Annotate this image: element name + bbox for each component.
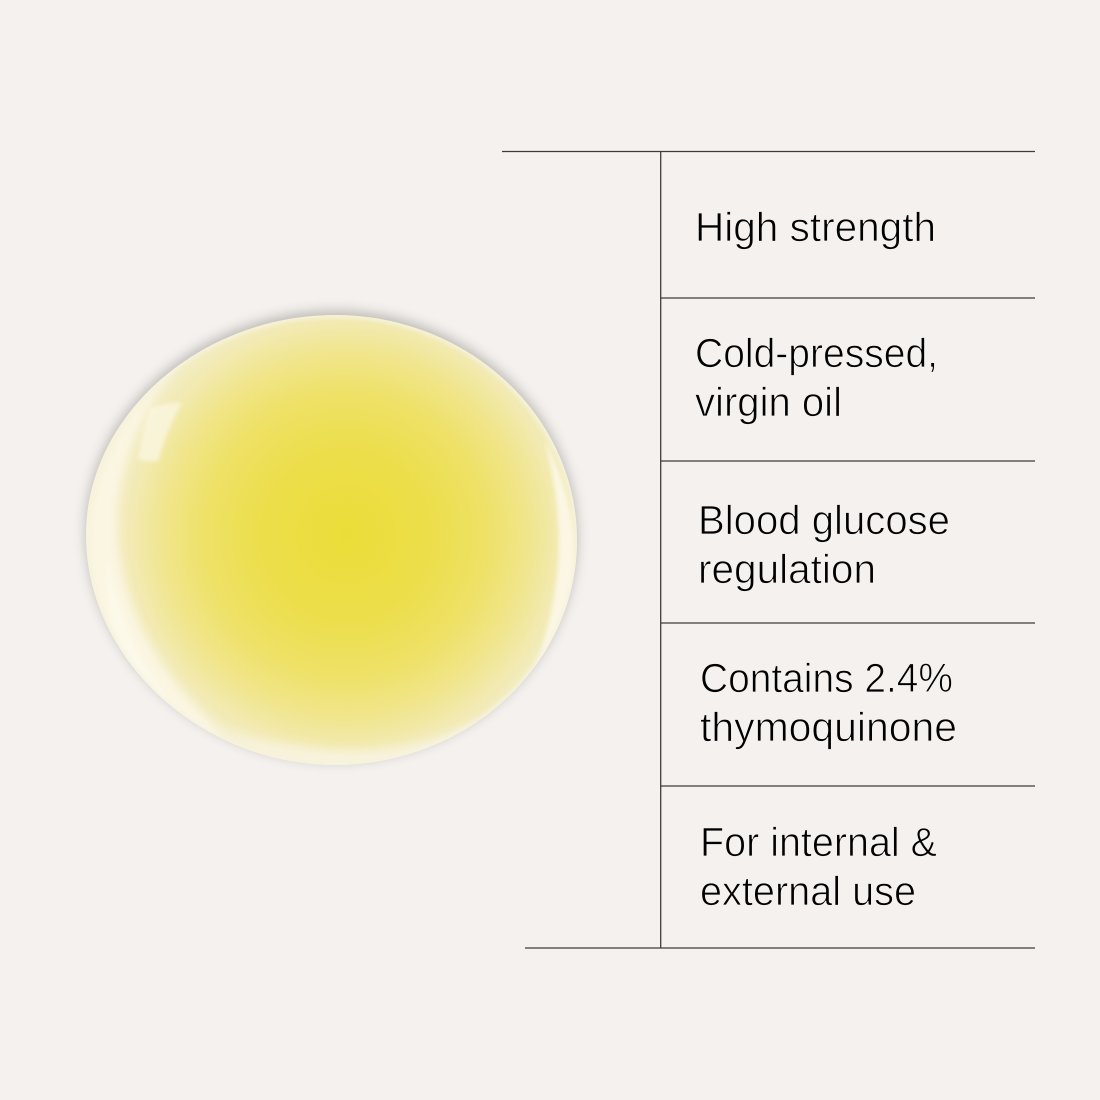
droplet shadow	[86, 311, 577, 761]
feature: blood glucose regulation	[698, 497, 950, 592]
table rules	[502, 152, 1035, 948]
feature: thymoquinone content	[700, 655, 957, 750]
droplet highlights	[86, 315, 577, 770]
feature: internal and external use: For internal &	[700, 819, 937, 865]
row rule 1	[661, 297, 1035, 299]
row rule 3	[661, 622, 1035, 624]
row rule 2	[661, 460, 1035, 462]
droplet body	[86, 315, 577, 765]
row rule 4	[661, 785, 1035, 787]
feature: thymoquinone content: Contains 2.4%	[700, 655, 953, 701]
feature: thymoquinone content: thymoquinone	[700, 704, 957, 750]
feature: blood glucose regulation: regulation	[698, 546, 876, 592]
feature: cold-pressed virgin oil: Cold-pressed,	[695, 330, 938, 376]
feature: cold-pressed virgin oil	[695, 330, 938, 425]
feature: internal and external use: external use	[700, 868, 916, 914]
feature: cold-pressed virgin oil: virgin oil	[695, 379, 842, 425]
vertical rule	[660, 152, 662, 948]
feature: blood glucose regulation: Blood glucose	[698, 497, 950, 543]
top rule	[502, 150, 1035, 152]
feature: internal and external use	[700, 819, 937, 914]
bottom rule	[525, 947, 1035, 949]
feature: high strength: High strength	[695, 204, 936, 250]
oil droplet	[86, 311, 577, 770]
